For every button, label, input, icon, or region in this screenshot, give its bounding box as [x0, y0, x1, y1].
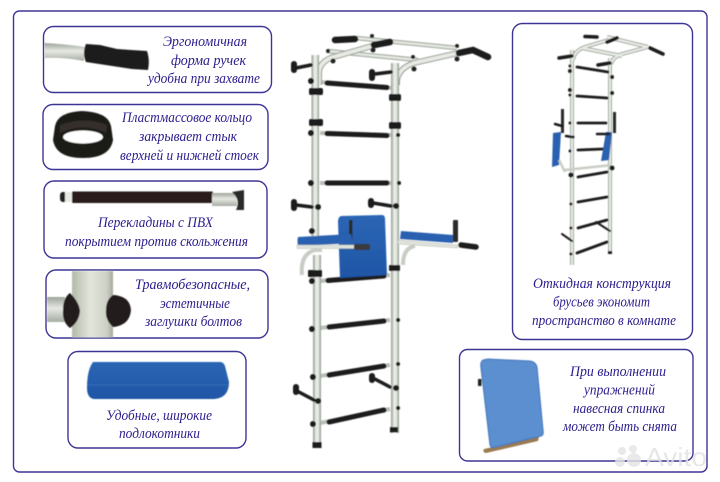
- panel: bolt caps: [46, 270, 268, 338]
- text: ergonomic handles: [146, 34, 260, 87]
- text: ergonomic handles: Эргономичная: [163, 34, 247, 50]
- side pegs: [291, 61, 391, 400]
- main wall bars illustration: [291, 34, 488, 448]
- text: folding construction: брусьев экономит: [553, 294, 650, 310]
- panel: plastic ring: [43, 104, 268, 170]
- text: PVC rungs: покрытием против скольжения: [65, 234, 248, 250]
- text: armrests: подлокотники: [119, 426, 200, 442]
- panel: folding construction: [512, 24, 692, 340]
- text: plastic ring: закрывает стык: [138, 129, 238, 145]
- rungs: [320, 82, 392, 423]
- backrest: [338, 215, 387, 278]
- bolts and clamps: [308, 78, 401, 427]
- icon: blue armrest: [87, 362, 229, 399]
- text: removable backrest: При выполнении: [569, 364, 666, 380]
- posts: [312, 55, 399, 448]
- text: plastic ring: Пластмассовое кольцо: [121, 110, 252, 126]
- right armrest: [398, 220, 476, 265]
- small wall bars illustration: [552, 36, 663, 265]
- top frame: [319, 34, 488, 85]
- text: removable backrest: [562, 364, 677, 435]
- text: folding construction: пространство в комнате: [532, 313, 676, 329]
- text: removable backrest: может быть снята: [562, 419, 677, 435]
- text: bolt caps: эстетичные: [160, 296, 230, 312]
- icon: bolt caps: [47, 271, 131, 338]
- text: plastic ring: верхней и нижней стоек: [120, 148, 260, 164]
- icon: handle grip: [44, 43, 149, 70]
- watermark: Avito: Avito: [645, 442, 707, 472]
- panel: armrests: [68, 352, 246, 448]
- text: plastic ring: [120, 110, 260, 164]
- panel: PVC rungs: [44, 181, 267, 258]
- text: armrests: Удобные, широкие: [106, 408, 212, 424]
- text: PVC rungs: Перекладины с ПВХ: [97, 215, 214, 231]
- text: bolt caps: Травмобезопасные,: [135, 277, 250, 293]
- left armrest: [297, 220, 370, 275]
- panel: ergonomic handles: [44, 26, 272, 92]
- text: bolt caps: заглушки болтов: [144, 314, 242, 330]
- text: removable backrest: упражнений: [582, 382, 655, 398]
- text: bolt caps: [135, 277, 250, 330]
- text: folding construction: [532, 276, 676, 329]
- icon: removable back pad: [478, 359, 543, 453]
- icon: PVC rung: [60, 190, 244, 210]
- text: PVC rungs: [65, 215, 248, 250]
- text: ergonomic handles: удобна при захвате: [146, 71, 260, 87]
- text: armrests: [106, 408, 212, 442]
- text: ergonomic handles: форма ручек: [171, 53, 247, 69]
- panel: removable backrest: [460, 350, 693, 461]
- text: removable backrest: навесная спинка: [573, 401, 665, 417]
- watermark: Avito: [615, 442, 707, 472]
- icon: plastic ring: [53, 111, 113, 158]
- text: folding construction: Откидная конструкция: [533, 276, 671, 292]
